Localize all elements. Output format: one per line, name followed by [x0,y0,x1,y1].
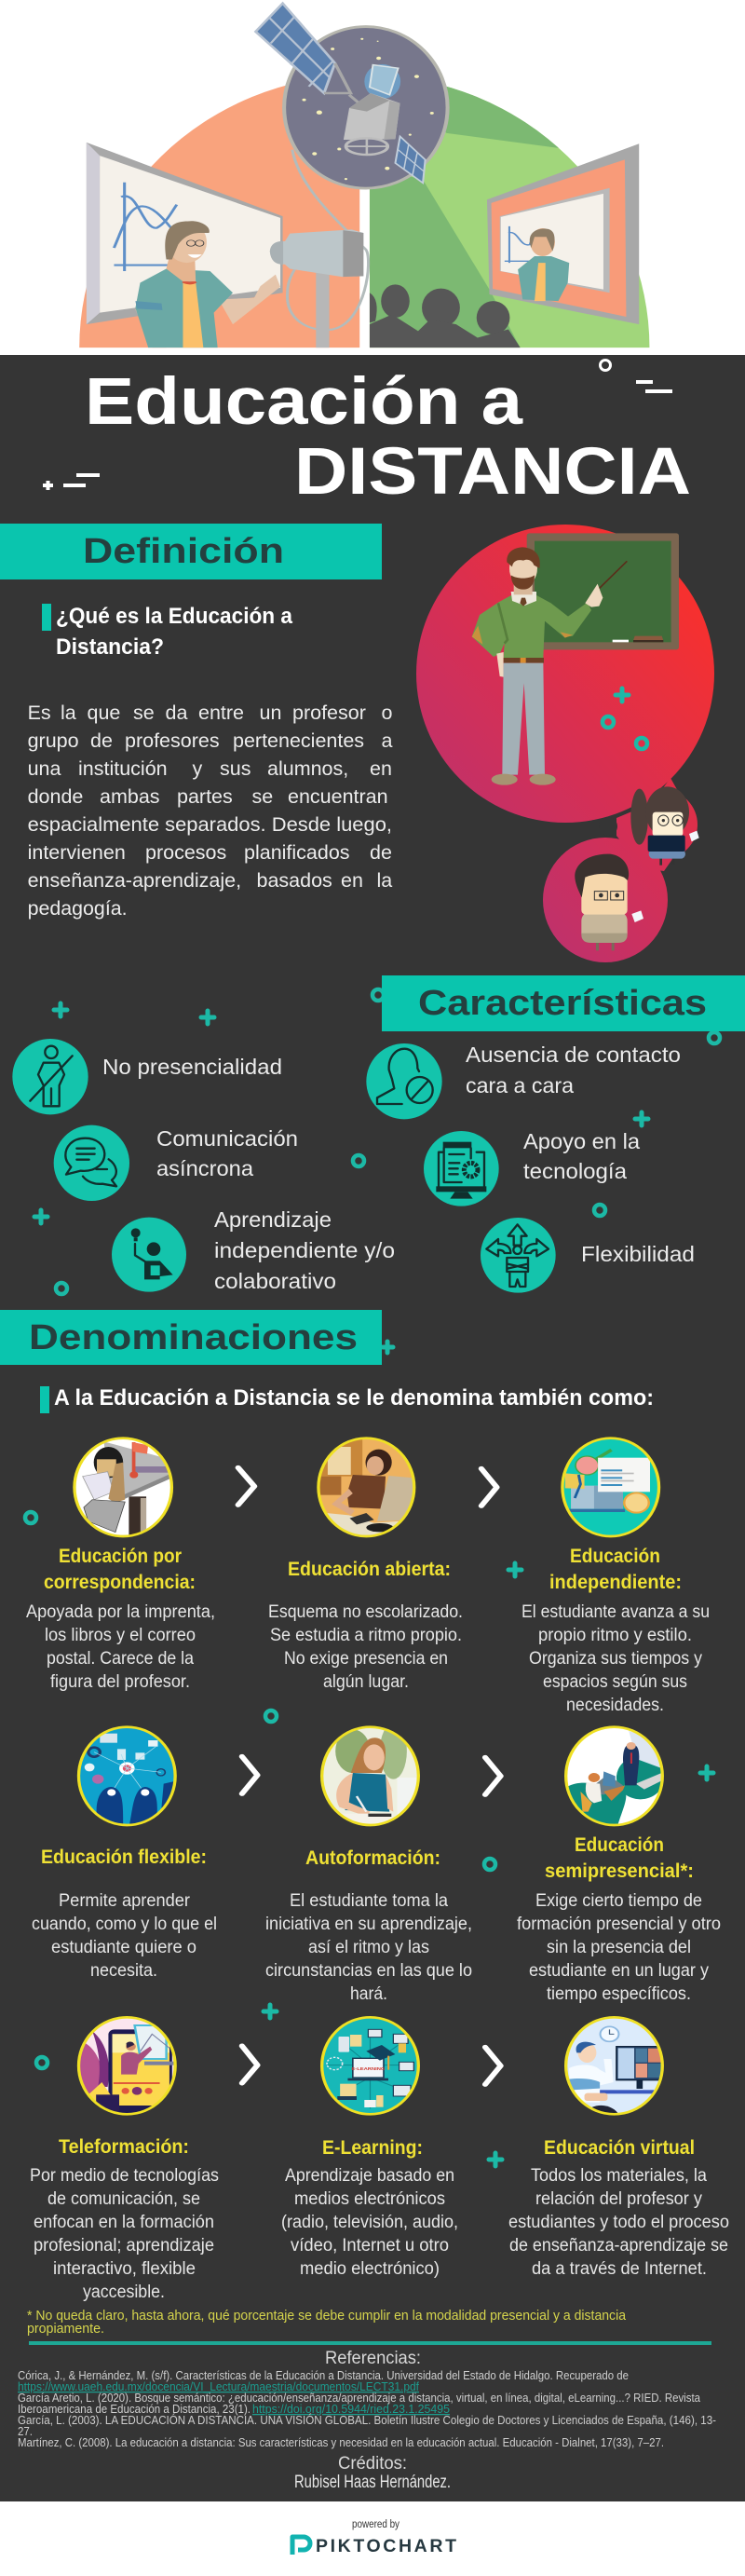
arrow [242,2046,257,2083]
text: e-learning: vídeo, Internet u otro [291,2236,449,2256]
definition paragraph: o [382,702,393,724]
icon: chat bubbles [54,1125,129,1201]
text: teleformación: profesional; aprendizaje [34,2236,214,2256]
row 2 images and arrows [76,1724,668,1827]
panel: características [12,975,745,1293]
definition paragraph: de [370,841,392,864]
text: educación abierta: Se estudia a ritmo propio. [270,1626,462,1645]
text: educación flexible: Educación flexible: [41,1847,207,1868]
definition paragraph: espacialmente separados. Desde luego, [28,813,392,836]
text: educación abierta: algún lugar. [323,1672,409,1692]
definition paragraph: en [341,869,363,892]
text: educación independiente: Educación [570,1546,660,1567]
text: e-learning: Aprendizaje basado en [285,2166,454,2186]
definition paragraph: planificados [244,841,350,864]
title sparkles [43,360,672,490]
teacher at chalkboard [472,533,679,785]
item: ausencia de contacto [366,1043,681,1119]
text: educación flexible [32,1847,217,1981]
item: aprendizaje independiente: Aprendizaje [214,1207,332,1232]
background sparkles [25,989,720,2166]
item: apoyo en la tecnología [424,1129,641,1206]
right screen with teacher replay [487,143,639,324]
item: apoyo en la tecnología: tecnología [523,1159,628,1183]
text: e-learning: (radio, televisión, audio, [281,2213,458,2232]
item: apoyo en la tecnología: Apoyo en la [523,1129,641,1153]
icon: person with lightbulb [112,1218,186,1292]
text: educación virtual: Todos los materiales, la [531,2166,707,2186]
piktochart footer [292,2519,456,2556]
definition paragraph: se [251,785,273,808]
text: e-learning [281,2137,458,2279]
green half dome [370,66,649,348]
definition paragraph: que [88,702,120,724]
photo: blended classroom [563,1724,668,1827]
row 3 images and arrows [76,2015,668,2118]
text: educación por correspondencia [26,1546,215,1692]
photo: video conference [563,2015,668,2118]
footnote: propiamente. [27,2321,104,2337]
text: educación independiente: Organiza sus tiempos y [529,1649,702,1669]
text: autoformación: iniciativa en su aprendizaje, [265,1915,472,1934]
subheading: qué es: ¿Qué es la Educación a [56,604,293,629]
heading bar: Definición: Definición [83,532,284,571]
text: educación por correspondencia: postal. Carece de la [47,1649,194,1669]
text: teleformación: yaccesible. [83,2283,165,2302]
left screen with teacher [87,143,283,348]
text: autoformación: así el ritmo y las [308,1938,429,1957]
text: educación independiente: propio ritmo y estilo. [538,1626,692,1645]
references: Córica, J., & Hernández, M. (s/f). Características de la Educación a Distancia. Universidad del Estado de Hidalgo. Recuperado de [18,2369,629,2382]
text: e-learning: medio electrónico) [300,2259,440,2279]
subheading: qué es: Distancia? [56,634,164,660]
arrow [481,1468,496,1506]
hero illustration: satellite transmission [79,4,649,348]
text: teleformación: Teleformación: [59,2136,189,2158]
definition paragraph: da [166,702,187,724]
definition paragraph: sus [220,757,251,780]
item: aprendizaje independiente: colaborativo [214,1269,336,1293]
student boy [575,854,643,950]
satellite in space circle [255,4,448,188]
definition paragraph: grupo [28,729,79,752]
text: educación independiente: independiente: [549,1572,682,1593]
item: ausencia de contacto: cara a cara [466,1073,575,1097]
audience silhouettes [370,284,521,348]
piktochart footer: PIKTOCHART [316,2536,456,2556]
definition paragraph [28,702,392,920]
text: educación semipresencial: semipresencial*: [545,1860,694,1882]
text: educación flexible: Permite aprender [59,1891,191,1911]
item: no presencialidad [12,1039,282,1114]
definition paragraph: partes [177,785,233,808]
panel: denominaciones [0,1310,729,2302]
text: educación flexible: estudiante quiere o [51,1938,196,1957]
arrow [485,1757,501,1794]
definition paragraph: de [90,729,113,752]
definition paragraph: procesos [145,841,226,864]
text: educación por correspondencia: Apoyada por la imprenta, [26,1602,215,1622]
definition paragraph: la [61,702,76,724]
item: flexibilidad [481,1218,695,1293]
definition paragraph: profesor [292,702,366,724]
item: comunicación asíncrona: Comunicación [156,1126,298,1151]
heading bar: Características: Características [418,984,707,1023]
text: autoformación [265,1847,472,2004]
title: Educación a [85,365,523,439]
icon: person crossed out [12,1039,88,1114]
photo: woman with laptop [316,1433,416,1538]
cable [287,150,369,330]
references: https://doi.org/10.5944/ried.23.1.25495 [252,2403,450,2416]
definition paragraph: basados [257,869,332,892]
photo: student writing [320,1724,420,1827]
text: teleformación: enfocan en la formación [34,2213,214,2232]
arrow [485,2047,501,2084]
definition paragraph: encuentran [288,785,388,808]
definition paragraph: una [28,757,61,780]
photo: connected minds [76,1724,177,1827]
credits: Créditos: [338,2453,407,2474]
text: teleformación: Por medio de tecnologías [30,2166,219,2186]
text: educación semipresencial: estudiante en un lugar y [529,1961,709,1981]
heading bar: Denominaciones: Denominaciones [29,1318,358,1357]
item: no presencialidad: No presencialidad [102,1055,282,1079]
text: educación semipresencial: formación presencial y otro [517,1915,721,1934]
blob illustration: teacher and students [416,525,714,962]
references: Martínez, C. (2008). La educación a distancia: Sus características y necesidad en la educación actual. Educación - Dialnet, 17(33), 7–27. [18,2436,664,2449]
arrow [238,1467,254,1505]
references: Referencias: [325,2348,421,2368]
definition paragraph: institución [78,757,168,780]
references [18,2348,716,2449]
text: educación virtual: relación del profesor y [535,2189,702,2209]
definition paragraph: pedagogía. [28,897,128,920]
text: educación semipresencial: tiempo específicos. [547,1984,691,2004]
credits [294,2453,451,2492]
text: e-learning: medios electrónicos [294,2189,445,2209]
photo: e-learning network [320,2015,420,2118]
text: autoformación: Autoformación: [305,1847,440,1869]
text: educación virtual: da a través de Internet. [532,2259,707,2279]
icon: piktochart logo [292,2537,310,2555]
text: educación semipresencial: Exige cierto tiempo de [535,1891,702,1911]
text: teleformación [30,2136,219,2302]
references: https://www.uaeh.edu.mx/docencia/VI_Lectura/maestria/documentos/LECT31.pdf [18,2380,419,2393]
definition paragraph: pertenecientes [233,729,364,752]
heading bar: Denominaciones [0,1310,382,1365]
title: DISTANCIA [294,435,691,509]
text: teleformación: de comunicación, se [47,2189,200,2209]
references: Iberoamericana de Educación a Distancia, 23(1). [18,2403,251,2416]
text: e-learning: E-Learning: [322,2137,423,2159]
text: educación virtual: estudiantes y todo el proceso [508,2213,729,2232]
credits: Rubisel Haas Hernández. [294,2473,451,2492]
photo: e-learning network: E-LEARNING [351,2066,385,2072]
definition paragraph: alumnos, [267,757,348,780]
text: educación flexible: necesita. [90,1961,157,1981]
subheading: qué es [42,604,293,660]
photo: video lesson on phone [76,2015,177,2118]
definition paragraph: intervienen [28,841,126,864]
divider line [29,2341,711,2345]
text: educación independiente: El estudiante avanza a su [522,1602,710,1622]
text: educación por correspondencia: Educación por [59,1546,182,1567]
text: autoformación: El estudiante toma la [290,1891,448,1911]
item: comunicación asíncrona [54,1125,298,1201]
student girl [630,786,699,865]
text: educación flexible: cuando, como y lo que el [32,1915,217,1934]
text: educación abierta [268,1559,463,1692]
photo: mailbox [73,1437,173,1537]
definition paragraph: en [370,757,392,780]
text: educación semipresencial [517,1834,721,2004]
icon: monitor with gear [424,1131,499,1206]
definition paragraph: entre [198,702,244,724]
footnote: * No queda claro, hasta ahora, qué porcentaje se debe cumplir en la modalidad presencial y a distancia [27,2308,627,2324]
text: educación independiente: espacios según sus [543,1672,687,1692]
text: educación abierta: Esquema no escolarizado. [268,1602,463,1622]
text: educación por correspondencia: correspondencia: [44,1572,196,1593]
arrow [242,1756,257,1793]
text: educación por correspondencia: los libros y el correo [45,1626,196,1645]
definition paragraph: donde [28,785,83,808]
text: educación independiente [522,1546,710,1715]
heading bar: Definición [0,524,382,579]
sparkle marks on blob [603,688,647,749]
text: educación virtual [508,2137,729,2279]
icon: person with three arrows [481,1218,556,1293]
panel: definición [0,524,714,962]
item: flexibilidad: Flexibilidad [581,1242,695,1266]
references: 27. [18,2425,33,2438]
photo: course timer [560,1433,664,1538]
text: educación semipresencial: sin la presencia del [547,1938,691,1957]
row 1 images and arrows [65,1433,664,1538]
text: educación abierta: Educación abierta: [288,1559,451,1580]
text: educación virtual: Educación virtual [544,2137,695,2159]
definition paragraph: y [192,757,203,780]
subheading: también como: A la Educación a Distancia se le denomina también como: [54,1385,654,1411]
definition paragraph: un [259,702,281,724]
definition paragraph: se [133,702,155,724]
definition paragraph: la [376,869,392,892]
text: educación virtual: de enseñanza-aprendizaje se [509,2236,728,2256]
text: autoformación: hará. [350,1984,387,2004]
piktochart footer: powered by [352,2519,400,2530]
text: educación independiente: necesidades. [566,1696,664,1715]
projector [270,229,363,348]
text: autoformación: circunstancias en las que lo [265,1961,472,1981]
orange half dome [79,75,359,348]
definition paragraph: enseñanza-aprendizaje, [28,869,241,892]
item: comunicación asíncrona: asíncrona [156,1156,254,1180]
text: teleformación: interactivo, flexible [53,2259,196,2279]
pink blob [416,525,714,962]
title [85,365,691,509]
footnote [27,2308,627,2337]
text: educación por correspondencia: figura del profesor. [50,1672,190,1692]
text: educación abierta: No exige presencia en [284,1649,448,1669]
item: aprendizaje independiente: independiente y/o [214,1238,395,1262]
item: ausencia de contacto: Ausencia de contacto [466,1043,681,1067]
definition paragraph: profesores [125,729,220,752]
item: aprendizaje independiente [112,1207,395,1293]
text: educación semipresencial: Educación [575,1834,664,1856]
icon: person with prohibition sign [366,1043,442,1119]
definition paragraph: a [382,729,393,752]
heading bar: Características [382,975,745,1031]
definition paragraph: ambas [100,785,160,808]
definition paragraph: Es [28,702,51,724]
